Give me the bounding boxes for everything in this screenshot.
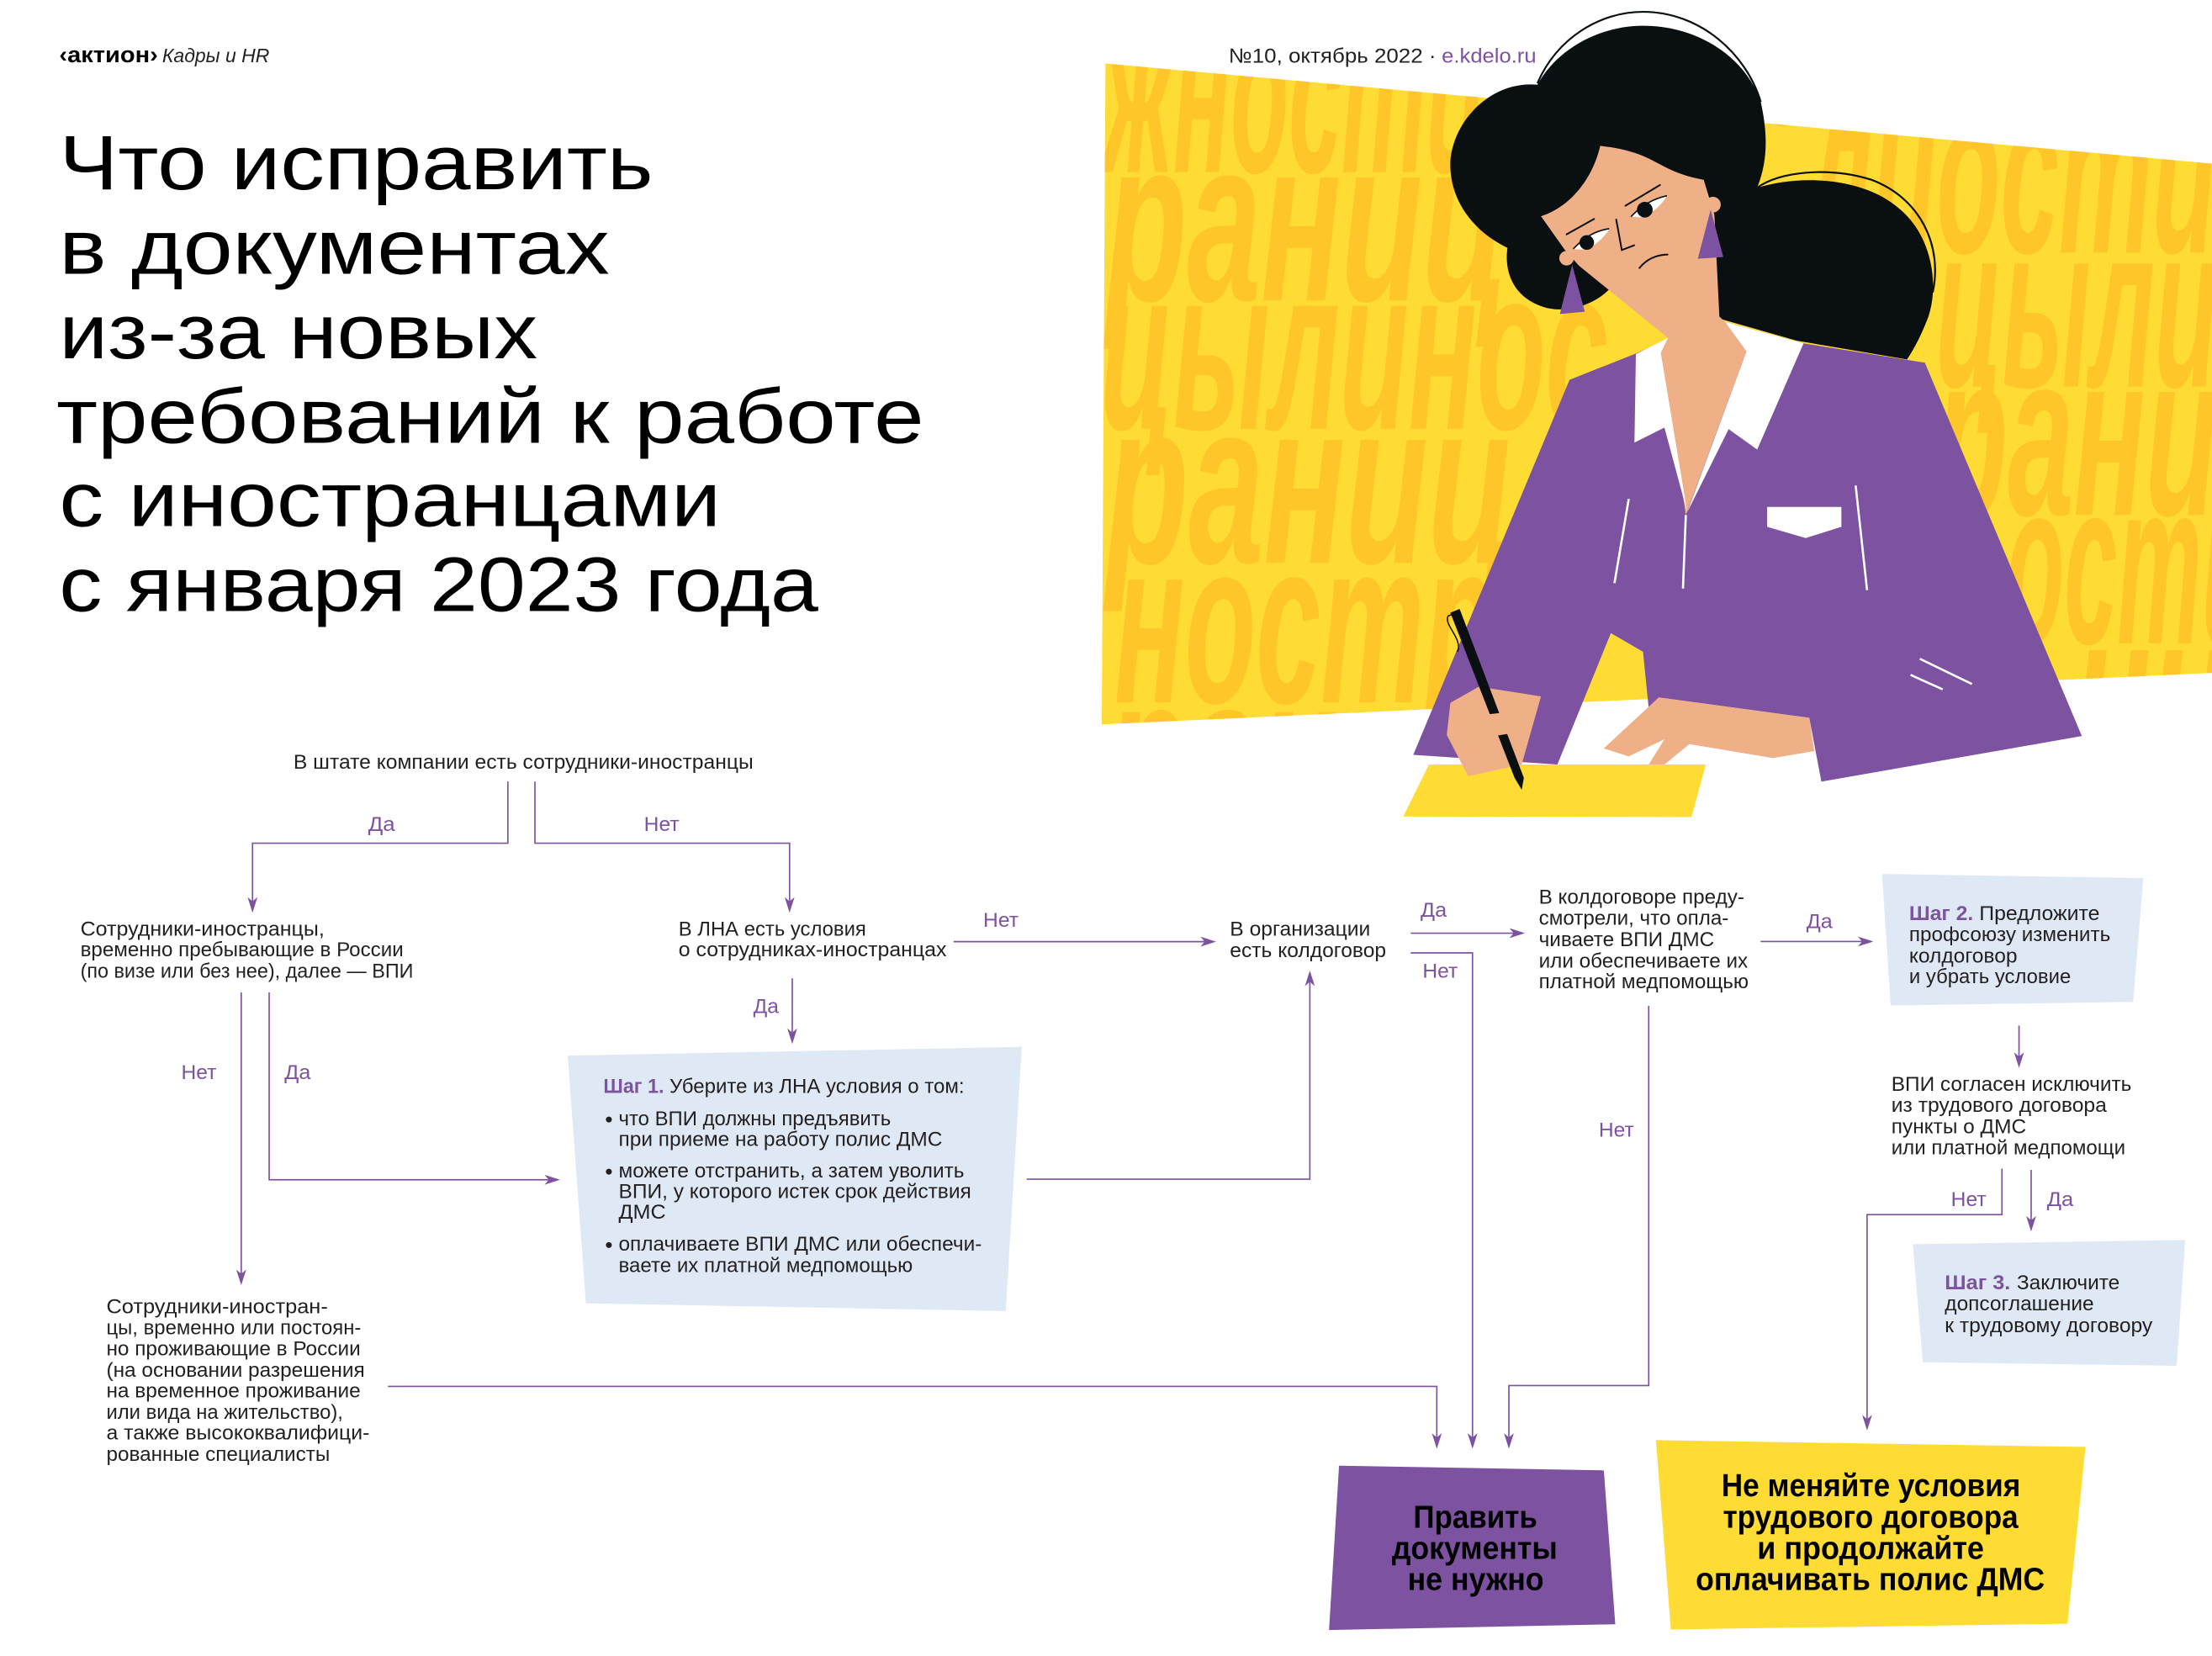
panel: step 3: допсоглашение (1945, 1293, 2094, 1315)
node: residents and specialists: или вида на жительство), (106, 1401, 343, 1424)
arrow labels: Да (2047, 1188, 2074, 1211)
panel: step 3: Шаг 3. (1945, 1272, 2010, 1294)
outcome: keep paying policy: оплачивать полис ДМС (1696, 1561, 2045, 1596)
node: temporary residents: Сотрудники-иностранцы, (81, 918, 325, 941)
panel: step 1: при приеме на работу полис ДМС (618, 1128, 942, 1151)
jacket seams (1615, 485, 1972, 690)
yellow lettering background (1102, 64, 2212, 725)
panel: step 3: Заключите (2017, 1272, 2119, 1294)
node: residents and specialists: (на основании разрешения (106, 1359, 365, 1382)
title: Что исправить (59, 119, 654, 206)
publisher logo (59, 42, 269, 67)
outcome: keep paying policy: Не меняйте условия (1722, 1468, 2020, 1503)
title: требований к работе (56, 373, 924, 460)
yellow lettering background: ностр (1114, 491, 1495, 754)
issue line (1229, 45, 1537, 68)
yellow lettering background: раниц (1102, 89, 1508, 352)
outcome: no changes needed: не нужно (1408, 1561, 1544, 1596)
node: employee agrees (1892, 1073, 2131, 1159)
node: employee agrees: из трудового договора (1892, 1094, 2107, 1117)
panel: step 1: что ВПИ должны предъявить (618, 1108, 891, 1130)
arrow labels (182, 813, 2074, 1211)
panel: step 2: профсоюзу изменить (1909, 923, 2110, 946)
earrings (1560, 209, 1723, 314)
arrow labels: Нет (1951, 1188, 1987, 1211)
icon: headband arcs (1537, 12, 1935, 293)
illustration: woman writing (1403, 12, 2082, 817)
node: agreement provides DMS (1539, 886, 1749, 993)
panel: step 3: к трудовому договору (1945, 1315, 2153, 1337)
node: LNA conditions (679, 918, 946, 961)
node: employee agrees: ВПИ согласен исключить (1892, 1073, 2131, 1096)
node: residents and specialists: на временное проживание (106, 1380, 361, 1403)
node: agreement provides DMS: платной медпомощью (1539, 971, 1749, 993)
node: residents and specialists: рованные специалисты (106, 1443, 330, 1466)
yellow lettering background: цылинос (1100, 218, 1608, 479)
node: agreement provides DMS: чиваете ВПИ ДМС (1539, 929, 1714, 951)
hand left (1447, 686, 1541, 776)
title: с января 2023 года (59, 540, 819, 627)
panel: step 1: Шаг 1. (603, 1075, 664, 1098)
outcome: no changes needed (1329, 1466, 1616, 1630)
node: residents and specialists: цы, временно или постоян- (106, 1316, 361, 1339)
node: agreement provides DMS: смотрели, что опла- (1539, 907, 1728, 930)
panel: step 1: ВПИ, у которого истек срок действия (618, 1181, 971, 1204)
collar (1634, 322, 1803, 512)
yellow lettering background: раниц (1103, 624, 1502, 886)
arrow labels: Нет (1599, 1119, 1634, 1141)
node: residents and specialists (106, 1296, 369, 1466)
outcome: keep paying policy: трудового договора (1723, 1499, 2019, 1534)
panel: step 3 (1913, 1240, 2185, 1366)
outcome: keep paying policy (1656, 1440, 2086, 1629)
node: temporary residents: временно пребывающие в России (81, 939, 404, 961)
title: с иностранцами (59, 456, 721, 543)
pocket (1767, 507, 1841, 538)
title (56, 119, 924, 627)
node: LNA conditions: о сотрудниках-иностранцах (679, 939, 946, 961)
issue line: №10, октябрь 2022 · (1229, 45, 1436, 68)
panel: step 2 (1882, 874, 2143, 1006)
panel: step 1 (568, 1047, 1022, 1311)
panel: step 1: Уберите из ЛНА условия о том: (669, 1075, 965, 1098)
panel: step 2: Предложите (1979, 902, 2099, 925)
publisher logo: Кадры и HR (162, 45, 269, 66)
panel: step 2: колдоговор (1909, 944, 2018, 967)
arrow labels: Да (1421, 899, 1447, 922)
panel: step 2: Шаг 2. (1909, 902, 1973, 925)
node: employee agrees: пункты о ДМС (1892, 1116, 2026, 1139)
outcome: keep paying policy: и продолжайте (1757, 1530, 1984, 1565)
face and neck (1541, 146, 1747, 515)
outcome: no changes needed: документы (1392, 1530, 1558, 1565)
panel: step 1: ДМС (618, 1201, 666, 1224)
node: agreement provides DMS: или обеспечиваете их (1539, 950, 1748, 972)
node: agreement provides DMS: В колдоговоре преду- (1539, 886, 1744, 908)
paper (1403, 765, 1706, 817)
node: residents and specialists: Сотрудники-иностран- (106, 1296, 328, 1319)
panel: step 2: и убрать условие (1909, 966, 2071, 988)
node: residents and specialists: но проживающие в России (106, 1338, 361, 1361)
ears (1559, 197, 1721, 266)
arrow labels: Нет (1422, 960, 1458, 982)
title: в документах (59, 203, 610, 290)
publisher logo: ‹актион› (59, 42, 158, 67)
jacket (1413, 322, 2082, 781)
flow arrows (236, 781, 2036, 1449)
brows nose mouth (1567, 185, 1668, 268)
arrow labels: Нет (983, 909, 1019, 932)
arrow labels: Да (284, 1061, 311, 1084)
node: temporary residents: (по визе или без нее), далее — ВПИ (81, 960, 413, 982)
arrow labels: Да (368, 813, 395, 836)
arrow labels: Да (1807, 911, 1833, 934)
pen (1447, 609, 1524, 790)
panel: step 1: можете отстранить, а затем уволить (618, 1160, 964, 1182)
yellow lettering background: раниц (1102, 352, 1515, 614)
node: employee agrees: или платной медпомощи (1892, 1136, 2125, 1159)
hair (1450, 26, 1933, 359)
panel: step 1: оплачиваете ВПИ ДМС или обеспечи- (618, 1233, 982, 1256)
face details (1559, 185, 1723, 314)
arrow labels: Нет (644, 813, 680, 836)
node: collective agreement (1230, 918, 1386, 962)
outcome: no changes needed: Править (1413, 1499, 1537, 1534)
hand right (1604, 697, 1814, 765)
arrow labels: Да (754, 995, 779, 1018)
node: temporary residents (81, 918, 413, 982)
node: LNA conditions: В ЛНА есть условия (679, 918, 866, 941)
issue line: e.kdelo.ru (1442, 45, 1537, 68)
node: residents and specialists: а также высококвалифици- (106, 1422, 369, 1445)
panel: step 1: ваете их платной медпомощью (618, 1254, 913, 1277)
node: collective agreement: В организации (1230, 918, 1370, 941)
start question: В штате компании есть сотрудники-иностранцы (294, 751, 754, 774)
arrow labels: Нет (182, 1061, 216, 1084)
title: из-за новых (59, 288, 537, 375)
eyes (1574, 196, 1667, 250)
node: collective agreement: есть колдоговор (1230, 939, 1386, 962)
